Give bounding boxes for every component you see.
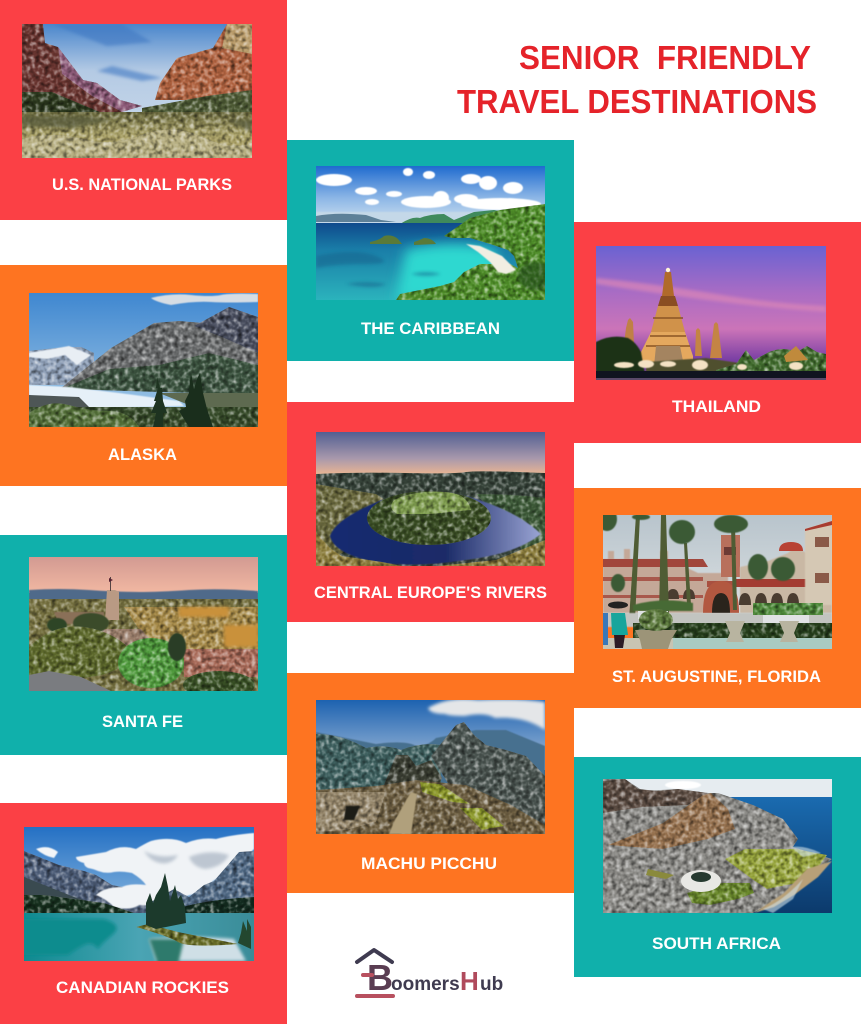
panel: U.S. National Parks	[0, 0, 287, 220]
label: ALASKA	[108, 445, 177, 464]
title: TRAVEL DESTINATIONS	[457, 84, 817, 121]
logo: BoomersHub	[357, 950, 503, 998]
logo wordmark: oomers	[391, 974, 460, 995]
photo: Wat Arun temple at dusk	[596, 246, 826, 380]
label: MACHU PICCHU	[361, 854, 497, 873]
panel: Alaska	[0, 265, 287, 486]
panel: South Africa	[574, 757, 861, 977]
logo wordmark: ub	[480, 974, 503, 995]
panel: Machu Picchu	[287, 673, 574, 893]
label: CANADIAN ROCKIES	[56, 978, 229, 997]
panel: Central Europe's Rivers	[287, 402, 574, 622]
photo: canyon with red cliffs	[22, 24, 252, 158]
photo: river horseshoe bend	[316, 432, 545, 566]
icon: house roof	[357, 950, 392, 962]
photo: glacier and mountains	[29, 293, 258, 427]
label: SOUTH AFRICA	[652, 934, 781, 953]
photo: tropical bay	[316, 166, 545, 300]
photo: town at dusk	[29, 557, 258, 691]
label: U.S. NATIONAL PARKS	[52, 175, 232, 194]
title: SENIOR FRIENDLY	[519, 40, 811, 77]
panel: Canadian Rockies	[0, 803, 287, 1024]
photo: mountain lake with island	[24, 827, 254, 961]
panel: St. Augustine, Florida	[574, 488, 861, 708]
label: THE CARIBBEAN	[361, 319, 500, 338]
label: THAILAND	[672, 397, 761, 416]
underline and cross bar	[357, 975, 393, 996]
photo: historic college courtyard with palms	[603, 515, 832, 649]
panel: Thailand	[574, 222, 861, 443]
photo: Cape Town aerial view	[603, 779, 832, 913]
title	[457, 40, 817, 121]
label: SANTA FE	[102, 712, 183, 731]
logo wordmark: H	[460, 966, 479, 996]
panel: The Caribbean	[287, 140, 574, 361]
panel: Santa Fe	[0, 535, 287, 755]
logo wordmark: B	[367, 957, 393, 998]
photo: Inca ruins and peak	[316, 700, 545, 834]
label: CENTRAL EUROPE'S RIVERS	[314, 583, 547, 602]
label: ST. AUGUSTINE, FLORIDA	[612, 667, 821, 686]
